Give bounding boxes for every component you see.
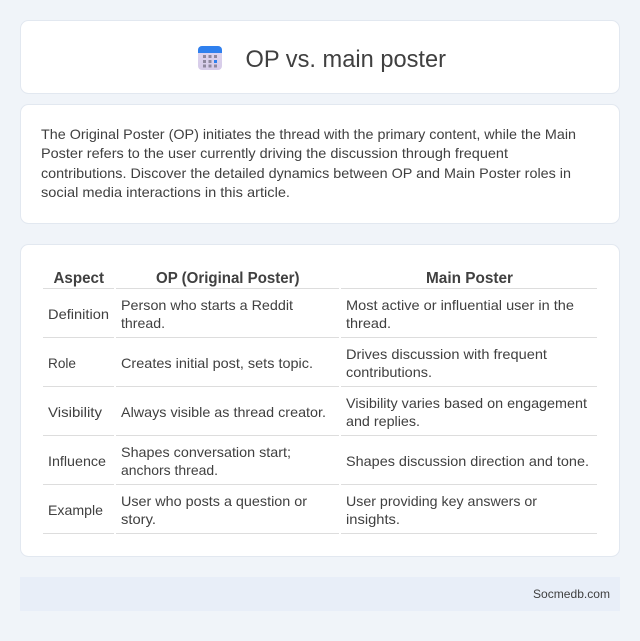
- row: example: Example: [48, 502, 103, 518]
- intro text: social media interactions in this article.: [41, 184, 290, 200]
- row: definition: Definition: [48, 306, 109, 322]
- row: role: contributions.: [346, 364, 432, 380]
- panel: comparison table: [20, 244, 620, 556]
- row: role: Drives discussion with frequent: [346, 346, 547, 362]
- row: definition: Most active or influential user in the: [346, 297, 574, 313]
- table header: Aspect: [54, 270, 104, 287]
- row: influence: Shapes discussion direction and tone.: [346, 453, 589, 469]
- row: visibility: and replies.: [346, 413, 420, 429]
- row: visibility: Visibility: [48, 404, 102, 420]
- panel: title card: [20, 20, 620, 94]
- row: role: [48, 346, 547, 380]
- intro text: The Original Poster (OP) initiates the thread with the primary content, while the Main: [41, 126, 576, 142]
- row: influence: anchors thread.: [121, 462, 218, 478]
- title: OP vs. main poster: [246, 46, 446, 73]
- row: definition: [48, 297, 574, 331]
- table header: [54, 270, 513, 287]
- footer credit: Socmedb.com: [533, 587, 610, 601]
- icon: calendar: [198, 46, 222, 70]
- intro text: contributions. Discover the detailed dynamics between OP and Main Poster roles in: [41, 165, 571, 181]
- row: visibility: [48, 395, 587, 429]
- row: definition: thread.: [121, 315, 165, 331]
- intro text: [41, 126, 576, 200]
- intro text: Poster refers to the user currently driving the discussion through frequent: [41, 145, 508, 161]
- row: visibility: Visibility varies based on engagement: [346, 395, 587, 411]
- row: influence: Influence: [48, 453, 106, 469]
- row: definition: thread.: [346, 315, 391, 331]
- table header: Main Poster: [426, 270, 513, 287]
- row: visibility: Always visible as thread creator.: [121, 404, 326, 420]
- row: role: Creates initial post, sets topic.: [121, 355, 313, 371]
- row: influence: Shapes conversation start;: [121, 444, 291, 460]
- row: influence: [48, 444, 589, 478]
- footer: [20, 577, 620, 611]
- row: example: [48, 493, 537, 527]
- row: example: story.: [121, 511, 156, 527]
- row: definition: Person who starts a Reddit: [121, 297, 293, 313]
- table header: OP (Original Poster): [156, 270, 300, 287]
- row: example: User providing key answers or: [346, 493, 537, 509]
- panel: intro: [20, 104, 620, 224]
- row: example: User who posts a question or: [121, 493, 307, 509]
- row: role: Role: [48, 355, 76, 371]
- row: example: insights.: [346, 511, 400, 527]
